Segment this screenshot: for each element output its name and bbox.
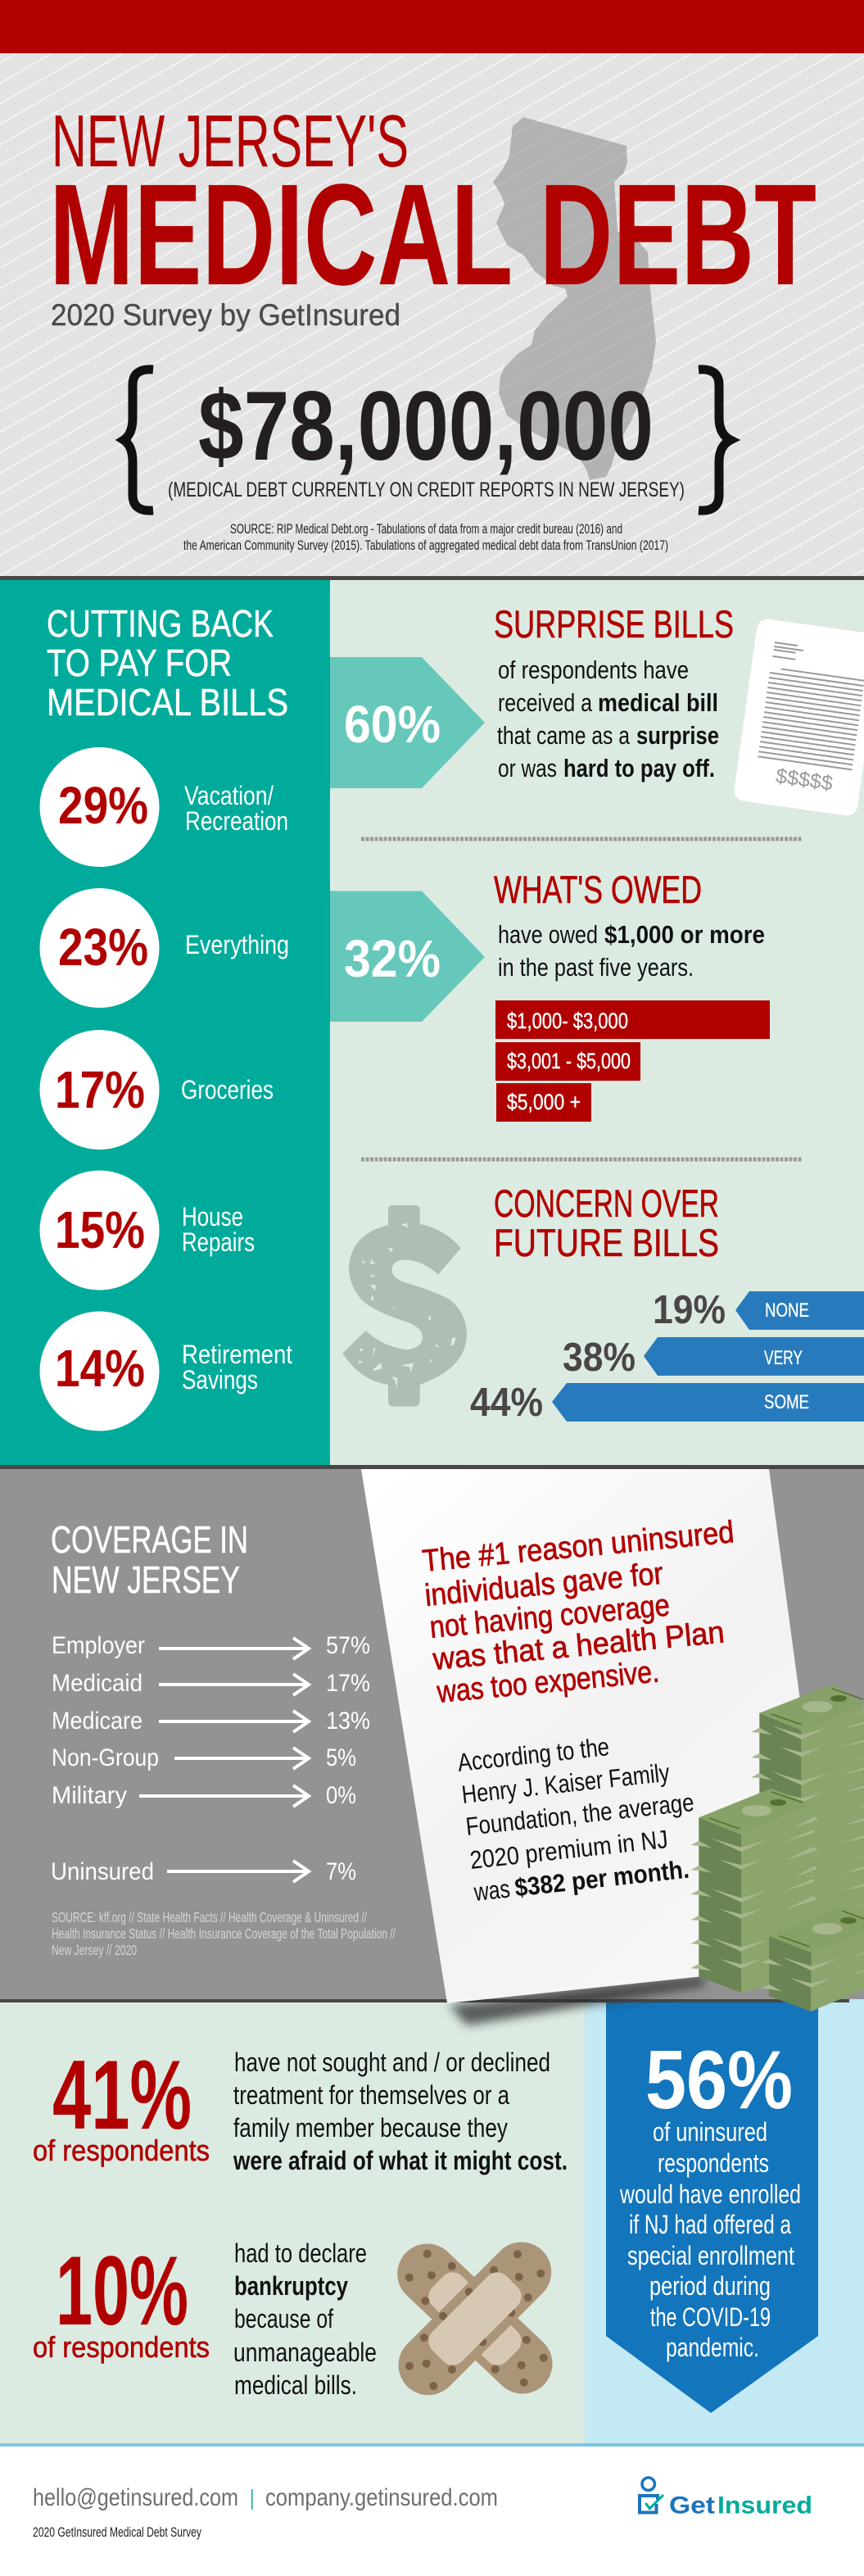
logo: GetInsured: Insured <box>717 2492 812 2519</box>
row: medicaid <box>52 1670 370 1697</box>
finding: 41%: family member because they <box>233 2113 508 2143</box>
panel: header <box>0 53 864 577</box>
finding: 41%: have not sought and / or declined <box>234 2048 550 2077</box>
contact links <box>33 2484 498 2511</box>
row: uninsured: 7% <box>326 1858 356 1885</box>
finding: 10%: medical bills. <box>234 2370 357 2400</box>
ribbon: 56%: pandemic. <box>666 2333 759 2362</box>
text: surprise bills: hard to pay off. <box>563 754 715 782</box>
item: house repairs: Repairs <box>182 1227 255 1257</box>
item: vacation: 29% <box>58 776 148 835</box>
heading: CUTTING BACK <box>47 602 274 645</box>
heading: concern over future bills: FUTURE BILLS <box>494 1221 719 1264</box>
row: military: 0% <box>326 1782 356 1809</box>
top red band <box>0 0 864 53</box>
money stack back <box>751 1685 864 1934</box>
money stack front <box>761 1907 864 2011</box>
icon: crossed bandages <box>405 2250 548 2390</box>
source text: the American Community Survey (2015). Tabulations of aggregated medical debt data from TransUnion (2017) <box>183 538 668 553</box>
row: uninsured: Uninsured <box>51 1858 154 1885</box>
finding: 10%: 10% <box>56 2236 188 2346</box>
row: military: Military <box>52 1782 127 1809</box>
bar: $1,000-$3,000: $1,000- $3,000 <box>507 1009 628 1033</box>
brace left <box>124 370 153 510</box>
text: what's owed: have owed <box>498 920 598 949</box>
ribbon: 56%: period during <box>649 2271 771 2301</box>
footer <box>0 2447 864 2576</box>
row: non-group: Non-Group <box>52 1744 159 1771</box>
text: surprise bills: that came as a <box>497 721 631 750</box>
item: retirement savings <box>39 1311 292 1431</box>
row: employer <box>52 1632 370 1659</box>
finding: 10%: because of <box>234 2304 333 2333</box>
row: military <box>52 1782 356 1809</box>
bar: $3,001-$5,000: $3,001 - $5,000 <box>507 1049 631 1073</box>
ribbon: 56%: of uninsured <box>653 2117 767 2147</box>
row: medicaid: Medicaid <box>52 1670 142 1697</box>
contact links: company.getinsured.com <box>265 2484 498 2511</box>
logo: GetInsured <box>640 2478 812 2519</box>
handwritten reason: was that a health Plan <box>431 1616 726 1677</box>
item: groceries: Groceries <box>181 1075 274 1104</box>
title: NEW JERSEY'S <box>52 101 409 183</box>
text: what's owed: $1,000 or more <box>604 920 765 949</box>
heading <box>47 602 288 723</box>
finding: 41%: were afraid of what it might cost. <box>233 2146 568 2175</box>
icon: medical bill document <box>733 618 864 817</box>
premium text: $382 per month. <box>513 1855 690 1903</box>
heading <box>51 1518 248 1601</box>
panel: bottom findings background <box>0 1999 864 2447</box>
finding: 41%: of respondents <box>33 2134 210 2167</box>
arrow: 32%: 32% <box>344 929 441 988</box>
premium text: Henry J. Kaiser Family <box>460 1758 672 1809</box>
bar: $5,000+: $5,000 + <box>507 1090 581 1114</box>
heading: TO PAY FOR <box>47 642 232 684</box>
handwritten reason: individuals gave for <box>423 1557 665 1613</box>
heading: concern over future bills <box>494 1181 719 1264</box>
money stack middle <box>690 1789 864 1993</box>
item: everything <box>39 888 289 1008</box>
text: surprise bills <box>497 655 719 782</box>
ribbon: 56%: respondents <box>658 2148 769 2178</box>
tag: none <box>653 1288 864 1332</box>
text: surprise bills: received a <box>498 688 593 717</box>
source text: SOURCE: kff.org // State Health Facts // Health Coverage & Uninsured // <box>52 1909 367 1925</box>
divider <box>0 1465 864 1469</box>
arrow: 32% <box>330 891 485 1022</box>
logo: GetInsured: Get <box>669 2492 715 2519</box>
source text: New Jersey // 2020 <box>52 1942 137 1958</box>
row: employer: 57% <box>326 1632 370 1659</box>
item: vacation <box>39 747 288 867</box>
text: surprise bills: or was <box>498 754 557 782</box>
icon: stacks of money <box>690 1685 864 2011</box>
source text: Health Insurance Status // Health Insurance Coverage of the Total Population // <box>52 1925 396 1942</box>
item: everything: Everything <box>185 930 289 959</box>
panel: cutting back <box>0 580 330 1465</box>
panel: survey results <box>330 580 864 1465</box>
tag: none: NONE <box>765 1299 809 1322</box>
icon: New Jersey map <box>493 117 656 480</box>
tag: some <box>470 1381 864 1425</box>
item: house repairs: 15% <box>55 1200 145 1259</box>
tag: very: 38% <box>563 1336 636 1380</box>
item: house repairs: House <box>182 1202 243 1231</box>
text: surprise bills: medical bill <box>598 688 718 717</box>
ribbon: 56%: special enrollment <box>627 2241 794 2270</box>
bar: $5,000+ <box>496 1083 591 1122</box>
finding: 10%: unmanageable <box>233 2338 377 2367</box>
item: retirement savings: Retirement <box>182 1340 292 1369</box>
finding: 10%: of respondents <box>33 2330 210 2364</box>
row: medicare: Medicare <box>52 1708 142 1735</box>
tag: some: 44% <box>470 1381 543 1425</box>
row: non-group: 5% <box>326 1744 356 1771</box>
finding: 10%: had to declare <box>234 2238 367 2268</box>
finding: 41%: treatment for themselves or a <box>233 2080 509 2110</box>
big number: $78,000,000 <box>198 371 654 481</box>
text: what's owed <box>498 920 765 982</box>
bar: $1,000-$3,000 <box>495 1000 770 1039</box>
premium text: was <box>472 1874 511 1907</box>
source text <box>52 1909 396 1958</box>
item: retirement savings: 14% <box>55 1339 145 1398</box>
row: employer: Employer <box>52 1632 145 1659</box>
ribbon: 56%: 56% <box>645 2034 793 2126</box>
heading: NEW JERSEY <box>52 1558 240 1601</box>
finding: 10%: bankruptcy <box>234 2271 348 2301</box>
text: what's owed: in the past five years. <box>498 953 694 982</box>
row: medicare <box>52 1708 370 1735</box>
item: groceries: 17% <box>55 1060 145 1119</box>
panel: coverage in new jersey <box>0 1469 864 2002</box>
item: retirement savings: Savings <box>182 1365 258 1395</box>
finding: 41%: 41% <box>52 2040 192 2150</box>
icon: dollar sign <box>342 1205 467 1407</box>
handwritten reason: not having coverage <box>428 1588 672 1645</box>
row: medicaid: 17% <box>326 1670 370 1697</box>
handwritten reason <box>421 1515 735 1710</box>
premium text: According to the <box>456 1732 611 1777</box>
finding: 10% <box>33 2236 377 2400</box>
heading: surprise bills: SURPRISE BILLS <box>494 602 734 646</box>
tag: very <box>563 1336 864 1380</box>
premium text: Foundation, the average <box>464 1788 695 1841</box>
ribbon: 56% <box>606 2002 818 2413</box>
ribbon: 56%: would have enrolled <box>619 2179 801 2209</box>
item: house repairs <box>39 1170 255 1290</box>
brace right <box>699 370 731 510</box>
source text: SOURCE: RIP Medical Debt.org - Tabulations of data from a major credit bureau (2016) and <box>230 522 622 537</box>
handwritten reason: The #1 reason uninsured <box>421 1515 735 1579</box>
arrow: 60% <box>330 657 485 788</box>
item: groceries <box>39 1030 274 1150</box>
handwritten reason: was too expensive. <box>435 1655 661 1710</box>
row: non-group <box>52 1744 356 1771</box>
source text <box>183 522 668 553</box>
paper shadow <box>449 1976 704 2025</box>
text: surprise bills: surprise <box>636 721 719 750</box>
subtitle: 2020 Survey by GetInsured <box>51 298 400 332</box>
contact links: hello@getinsured.com <box>33 2484 238 2511</box>
tag: some: SOME <box>764 1391 809 1413</box>
item: vacation: Recreation <box>185 806 288 836</box>
premium text <box>456 1732 695 1907</box>
note paper <box>361 1469 835 2003</box>
arrow: 60%: 60% <box>344 695 441 754</box>
item: vacation: Vacation/ <box>184 781 274 810</box>
heading: concern over future bills: CONCERN OVER <box>494 1181 719 1225</box>
tag: very: VERY <box>764 1347 803 1369</box>
finding: 41% <box>33 2040 568 2175</box>
heading: MEDICAL BILLS <box>47 681 288 723</box>
heading: COVERAGE IN <box>51 1518 248 1561</box>
ribbon: 56%: if NJ had offered a <box>629 2210 791 2239</box>
item: everything: 23% <box>58 918 148 977</box>
premium text: 2020 premium in NJ <box>468 1825 669 1875</box>
tag: none: 19% <box>653 1288 726 1332</box>
bar: $3,001-$5,000 <box>495 1042 640 1081</box>
row: medicare: 13% <box>326 1708 370 1735</box>
icon: medical bill document: $$$$$ <box>774 764 835 795</box>
divider <box>0 576 864 580</box>
ribbon: 56%: the COVID-19 <box>650 2302 771 2332</box>
heading: what's owed: WHAT'S OWED <box>494 868 702 911</box>
row: uninsured <box>51 1858 356 1885</box>
caption: (MEDICAL DEBT CURRENTLY ON CREDIT REPORTS IN NEW JERSEY) <box>168 478 685 501</box>
text: surprise bills: of respondents have <box>498 655 689 684</box>
copyright: 2020 GetInsured Medical Debt Survey <box>33 2524 201 2540</box>
